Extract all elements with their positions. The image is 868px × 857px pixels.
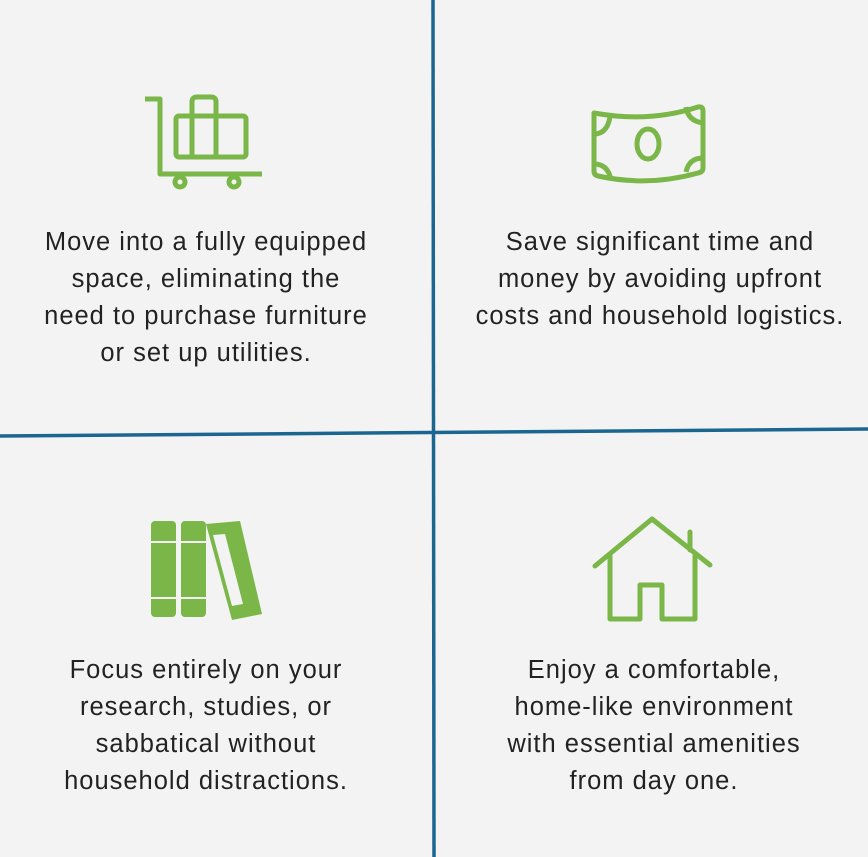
- text: fully equipped: need to purchase furniture: [44, 302, 368, 330]
- icon: books: [151, 521, 262, 620]
- text: save money: costs and household logistics.: [476, 302, 844, 330]
- text: fully equipped: [44, 228, 368, 367]
- text: comfortable: [507, 656, 801, 795]
- text: save money: Save significant time and: [506, 228, 814, 256]
- text: comfortable: home-like environment: [515, 693, 793, 721]
- text: focus: household distractions.: [64, 767, 348, 795]
- text: comfortable: from day one.: [570, 767, 738, 795]
- icon: house: [592, 516, 712, 622]
- text: focus: [64, 656, 348, 795]
- text: fully equipped: space, eliminating the: [72, 265, 340, 293]
- text: fully equipped: Move into a fully equipped: [45, 228, 367, 256]
- text: focus: Focus entirely on your: [70, 656, 342, 684]
- text: save money: [476, 228, 844, 330]
- text: comfortable: with essential amenities: [507, 730, 801, 758]
- text: fully equipped: or set up utilities.: [100, 339, 312, 367]
- icon: luggage cart: [145, 94, 262, 190]
- text: focus: sabbatical without: [96, 730, 316, 758]
- icon: money bill: [592, 104, 706, 184]
- text: comfortable: Enjoy a comfortable,: [528, 656, 780, 684]
- text: save money: money by avoiding upfront: [498, 265, 822, 293]
- text: focus: research, studies, or: [80, 693, 332, 721]
